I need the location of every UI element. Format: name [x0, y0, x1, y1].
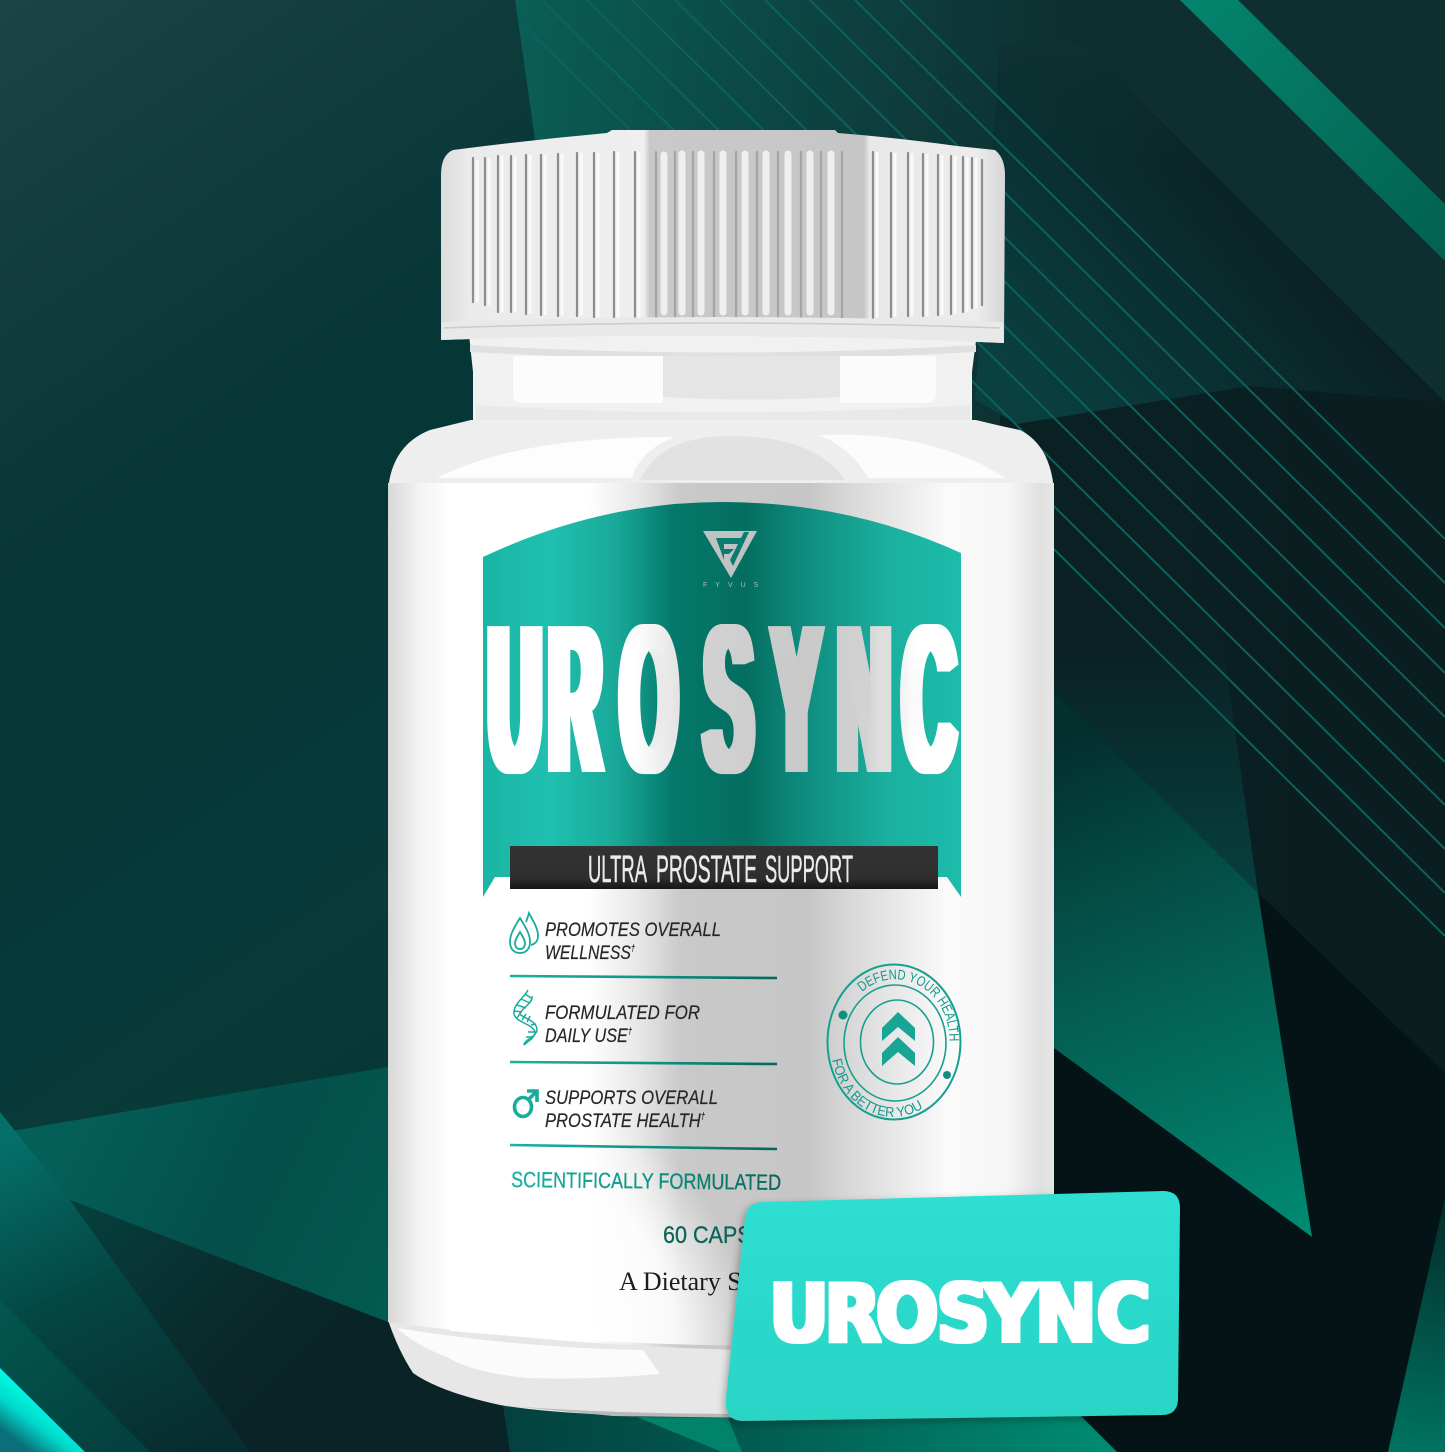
dietary line: A Dietary Supplement [619, 1267, 852, 1296]
capsule count: 60 CAPSULES [663, 1222, 808, 1249]
seal text bottom: FOR A BETTER YOU [832, 1058, 922, 1117]
dark strap [510, 846, 938, 889]
benefit text [545, 1087, 718, 1132]
benefit divider [510, 1062, 777, 1064]
seal dots [838, 1010, 951, 1079]
benefit text: WELLNESS [545, 942, 651, 964]
benefit text: † [701, 1111, 705, 1121]
sticker card [726, 1191, 1180, 1421]
benefit 1 [510, 913, 721, 964]
product name on label: UROSYNC [489, 581, 955, 818]
bottle cap [441, 130, 1005, 343]
benefit divider [510, 1145, 777, 1149]
benefit text: † [628, 1026, 632, 1036]
strap text: PROSTATE [656, 849, 757, 891]
bottle shoulder [388, 420, 1054, 490]
benefit text [545, 1002, 700, 1047]
benefit text: PROMOTES OVERALL [545, 919, 721, 941]
bottle neck [468, 325, 978, 420]
sticker wordmark: UROSYNC [769, 1269, 1151, 1361]
cap ribs: light ridges in shaded panel [664, 154, 831, 312]
background: diagonal pinstripes [524, 0, 1445, 936]
benefit 3 [514, 1087, 718, 1132]
bottle: SUPPORT [765, 849, 853, 891]
benefit text: † [631, 943, 635, 953]
benefit text: SUPPORTS OVERALL [545, 1087, 718, 1109]
strap text: ULTRA [588, 849, 647, 891]
benefit text [545, 919, 721, 964]
benefit text: PROSTATE HEALTH [545, 1110, 728, 1132]
seal badge [826, 964, 962, 1120]
body lower highlight [450, 1100, 760, 1346]
benefit divider [510, 976, 777, 978]
seal chevrons [882, 1012, 915, 1066]
icon: DNA helix [514, 990, 537, 1045]
seal text top: DEFEND YOUR HEALTH [856, 970, 959, 1040]
teal label panel [483, 502, 961, 897]
bottle [388, 130, 1054, 1418]
benefit text: FORMULATED FOR [545, 1002, 700, 1024]
benefit text: DAILY USE [545, 1025, 645, 1047]
cap ribs: highlights [477, 152, 976, 318]
bottle body [388, 483, 1054, 1350]
icon: male symbol [514, 1091, 537, 1116]
cap skirt lip [441, 317, 1004, 343]
icon: water drops [510, 913, 538, 953]
cap ribs: grooves [473, 152, 982, 318]
brand logo: Fyvus: FYVUS [703, 582, 766, 589]
brand logo: Fyvus [703, 531, 766, 589]
cap skirt line [444, 323, 1000, 328]
bottle base [388, 1320, 760, 1418]
benefit 2 [514, 990, 700, 1047]
tagline: SCIENTIFICALLY FORMULATED [511, 1167, 781, 1195]
